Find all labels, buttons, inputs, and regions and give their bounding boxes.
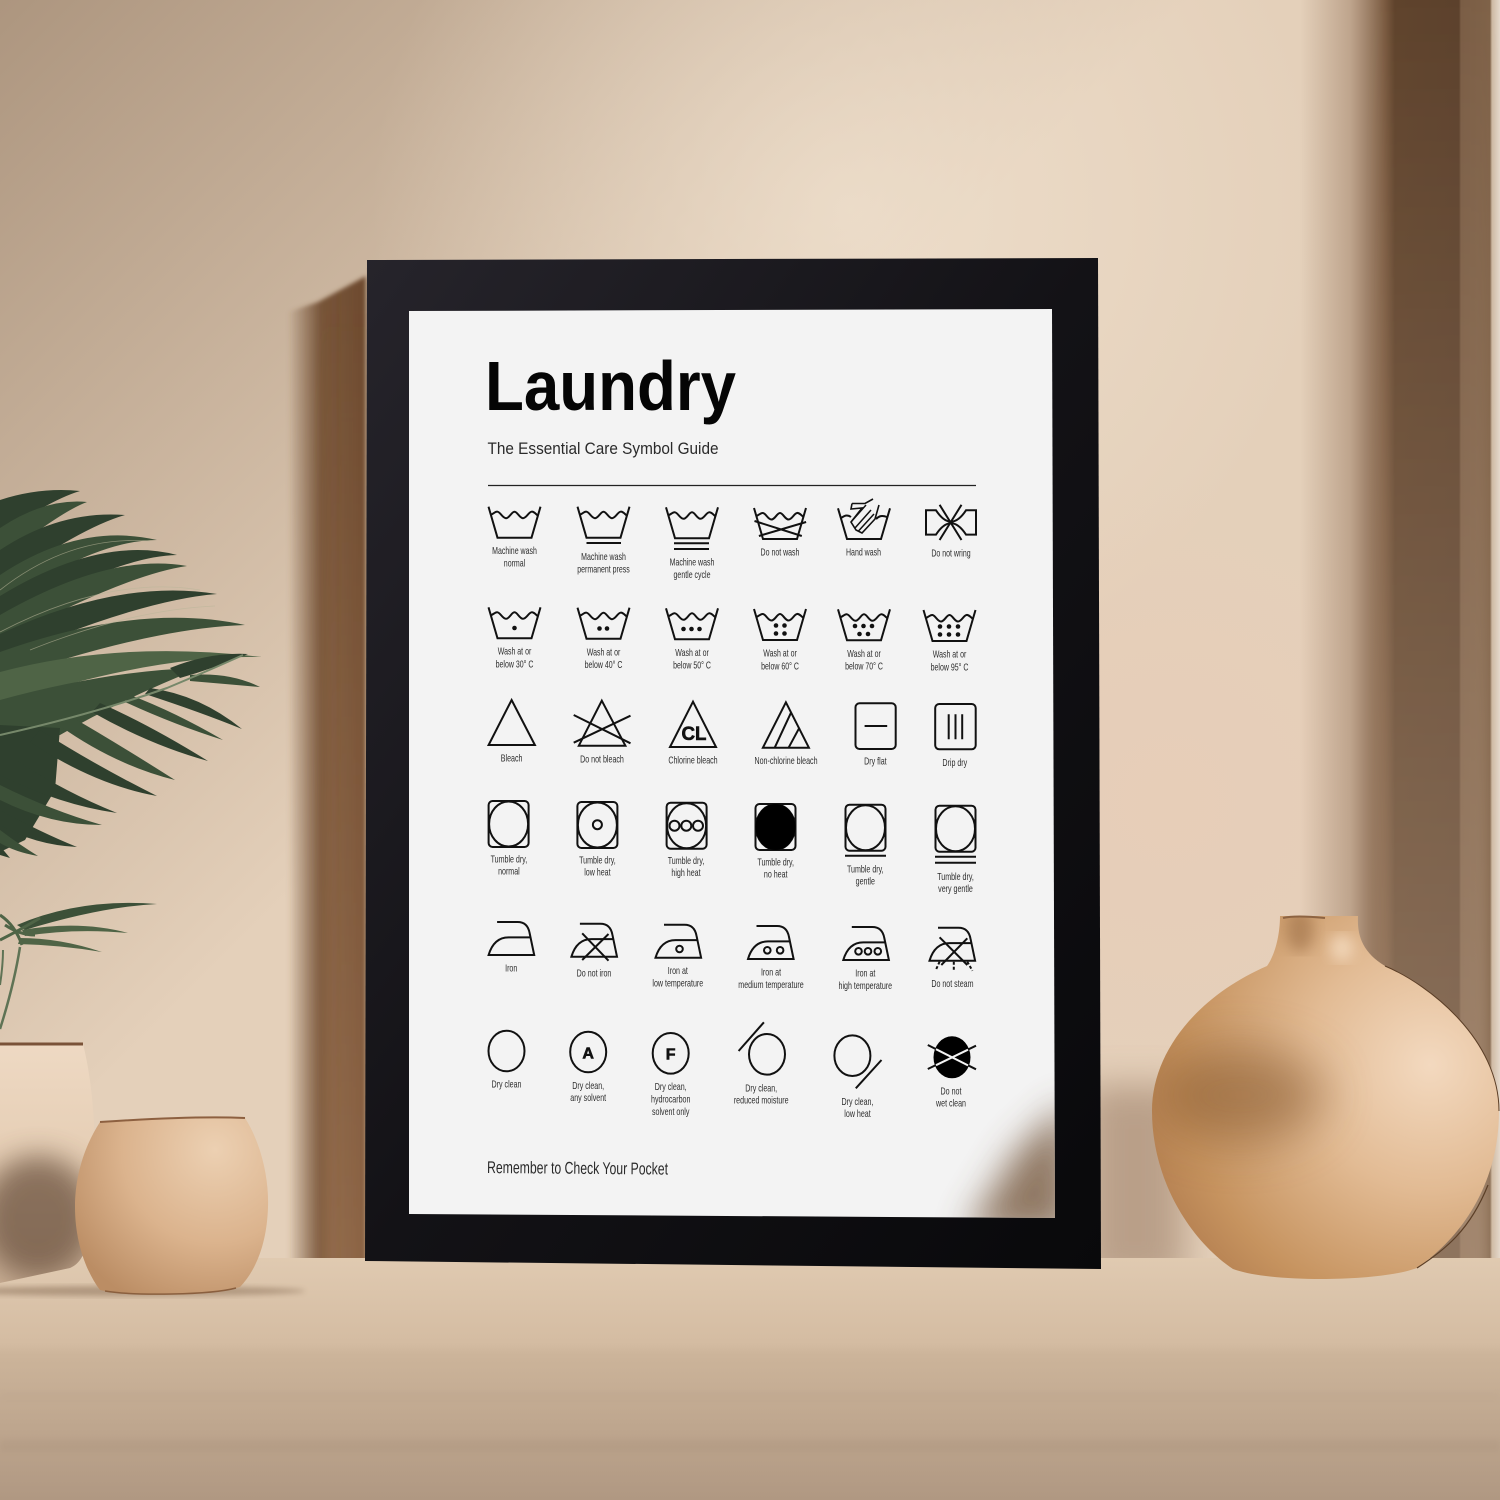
symbol: bleach (489, 700, 535, 764)
symbol: do not wring (926, 505, 976, 559)
symbol: tumble dry very gentle: very gentle (938, 883, 973, 894)
symbol: dry clean reduced moisture: reduced moisture (734, 1094, 789, 1106)
symbol: tumble dry high heat: Tumble dry, (668, 855, 704, 866)
symbol: machine wash permanent press: permanent press (577, 563, 630, 575)
symbol: tumble dry high heat (667, 803, 707, 878)
symbol: wash 30: Wash at or (498, 645, 531, 657)
symbol: dry clean hydrocarbon (651, 1033, 691, 1117)
symbol: iron high temperature (839, 927, 892, 992)
symbol: iron low temperature: low temperature (652, 977, 703, 989)
symbol: do not wet clean: wet clean (935, 1097, 966, 1109)
symbol: do not wring: Do not wring (931, 547, 971, 559)
symbol: dry clean: Dry clean (492, 1078, 522, 1090)
symbol: wash 95: below 95° C (931, 661, 968, 673)
symbol: iron low temperature: Iron at (668, 965, 688, 976)
symbol: do not iron (571, 924, 617, 979)
symbol: hand wash: Hand wash (846, 546, 881, 558)
symbol: tumble dry no heat: Tumble dry, (757, 856, 794, 868)
symbol: dry flat (856, 703, 896, 767)
symbol: do not bleach (574, 701, 630, 765)
symbol: non-chlorine bleach (754, 702, 818, 766)
symbol: iron (489, 922, 534, 974)
symbol: wash 40: below 40° C (585, 659, 622, 670)
symbol: dry clean low heat: low heat (844, 1108, 871, 1119)
symbol: machine wash normal (488, 507, 540, 569)
symbol: dry clean low heat: Dry clean, (842, 1096, 873, 1107)
pot shadow on shelf (0, 1286, 305, 1296)
symbol: wash 95: Wash at or (933, 648, 966, 660)
symbol: wash 70: below 70° C (845, 660, 883, 672)
symbol: iron medium temperature (738, 926, 804, 990)
symbol: iron high temperature: high temperature (839, 980, 892, 992)
symbol: bleach: Bleach (501, 752, 523, 764)
symbol: dry clean (488, 1031, 524, 1090)
symbol: iron low temperature (652, 925, 703, 989)
symbol: wash 30 (488, 607, 540, 670)
shelf (0, 1258, 1500, 1500)
symbol: machine wash gentle cycle (666, 507, 718, 580)
title: Laundry (485, 347, 736, 425)
symbol: do not wet clean: Do not (941, 1085, 962, 1097)
symbol: wash 40: Wash at or (587, 646, 620, 658)
footer note: Remember to Check Your Pocket (487, 1158, 668, 1179)
symbol: chlorine bleach (668, 702, 718, 766)
symbol: dry clean hydrocarbon: Dry clean, (655, 1081, 687, 1092)
symbol: tumble dry gentle: gentle (856, 875, 875, 887)
symbol: tumble dry high heat: high heat (671, 867, 701, 878)
lower palm frond (0, 654, 260, 858)
symbol: dry clean any solvent: A (582, 1045, 594, 1062)
plant (0, 490, 262, 1029)
symbol: chlorine bleach: Chlorine bleach (668, 754, 718, 766)
symbol: machine wash gentle cycle: gentle cycle (674, 569, 711, 580)
symbol: wash 40 (578, 608, 630, 670)
symbol: tumble dry normal: normal (498, 865, 520, 877)
symbol: wash 60: below 60° C (761, 660, 799, 672)
symbol: iron medium temperature: medium temperature (738, 979, 804, 990)
symbol: tumble dry very gentle: Tumble dry, (937, 871, 974, 882)
symbol: dry flat: Dry flat (864, 755, 887, 767)
symbol: dry clean any solvent: any solvent (570, 1092, 607, 1103)
symbol: do not bleach: Do not bleach (580, 753, 624, 765)
symbol: tumble dry no heat (756, 804, 796, 880)
symbol: wash 60: Wash at or (763, 647, 797, 659)
small palm frond (0, 903, 157, 1029)
front terracotta pot (75, 1117, 268, 1294)
symbol: tumble dry very gentle (935, 806, 976, 894)
symbol: tumble dry normal (489, 801, 529, 877)
symbol: iron: Iron (505, 962, 517, 974)
symbol: wash 50: below 50° C (673, 659, 711, 671)
symbol: iron high temperature: Iron at (855, 967, 876, 979)
symbol: do not steam: Do not steam (931, 978, 973, 989)
symbol: wash 30: below 30° C (496, 658, 533, 670)
frame and vase shadows on wall (288, 276, 1185, 1285)
black picture frame (365, 258, 1101, 1269)
symbol: do not wash: Do not wash (761, 546, 800, 558)
symbol: dry clean hydrocarbon: solvent only (652, 1106, 690, 1117)
symbol: do not wash (754, 508, 806, 558)
symbol: chlorine bleach: CL (682, 724, 707, 745)
symbol: drip dry: Drip dry (942, 757, 968, 768)
symbol: dry clean any solvent: Dry clean, (572, 1080, 604, 1091)
symbol: wash 50: Wash at or (675, 647, 709, 658)
symbol: drip dry (935, 704, 976, 768)
symbol: machine wash gentle cycle: Machine wash (670, 556, 715, 568)
symbol: machine wash permanent press (577, 507, 630, 575)
symbol: do not steam (930, 928, 975, 989)
symbol: dry clean low heat (834, 1035, 882, 1119)
symbol: machine wash normal: normal (504, 557, 525, 569)
symbol: tumble dry low heat (577, 802, 617, 878)
symbol: tumble dry gentle (845, 805, 886, 887)
upper palm frond (0, 490, 262, 705)
symbol: tumble dry low heat: Tumble dry, (579, 854, 616, 866)
symbol: tumble dry gentle: Tumble dry, (847, 863, 884, 875)
symbol: non-chlorine bleach: Non-chlorine bleach (754, 755, 818, 766)
symbol: dry clean hydrocarbon: F (666, 1046, 676, 1063)
symbol: tumble dry normal: Tumble dry, (491, 853, 527, 865)
symbol: dry clean hydrocarbon: hydrocarbon (651, 1093, 691, 1105)
symbol: wash 70: Wash at or (847, 648, 881, 659)
poster panel (409, 309, 1072, 1235)
back cream pot (0, 1044, 96, 1283)
symbol: do not wet clean (928, 1036, 976, 1109)
subtitle: The Essential Care Symbol Guide (488, 439, 718, 458)
symbol: tumble dry low heat: low heat (584, 866, 611, 878)
symbol: wash 50 (666, 608, 718, 671)
large round vase (1152, 908, 1499, 1279)
symbol: wash 70 (838, 609, 890, 672)
symbol: dry clean reduced moisture (734, 1022, 789, 1106)
symbol: tumble dry no heat: no heat (764, 868, 788, 880)
symbol: wash 95 (924, 610, 976, 673)
symbol: hand wash (838, 499, 890, 558)
symbol: do not iron: Do not iron (577, 967, 611, 979)
symbol: dry clean reduced moisture: Dry clean, (745, 1082, 777, 1094)
symbol: wash 60 (754, 609, 806, 672)
symbol: iron medium temperature: Iron at (761, 966, 782, 978)
symbol: machine wash permanent press: Machine wash (581, 551, 626, 562)
symbol: dry clean any solvent (570, 1032, 607, 1103)
symbol: machine wash normal: Machine wash (492, 545, 537, 556)
